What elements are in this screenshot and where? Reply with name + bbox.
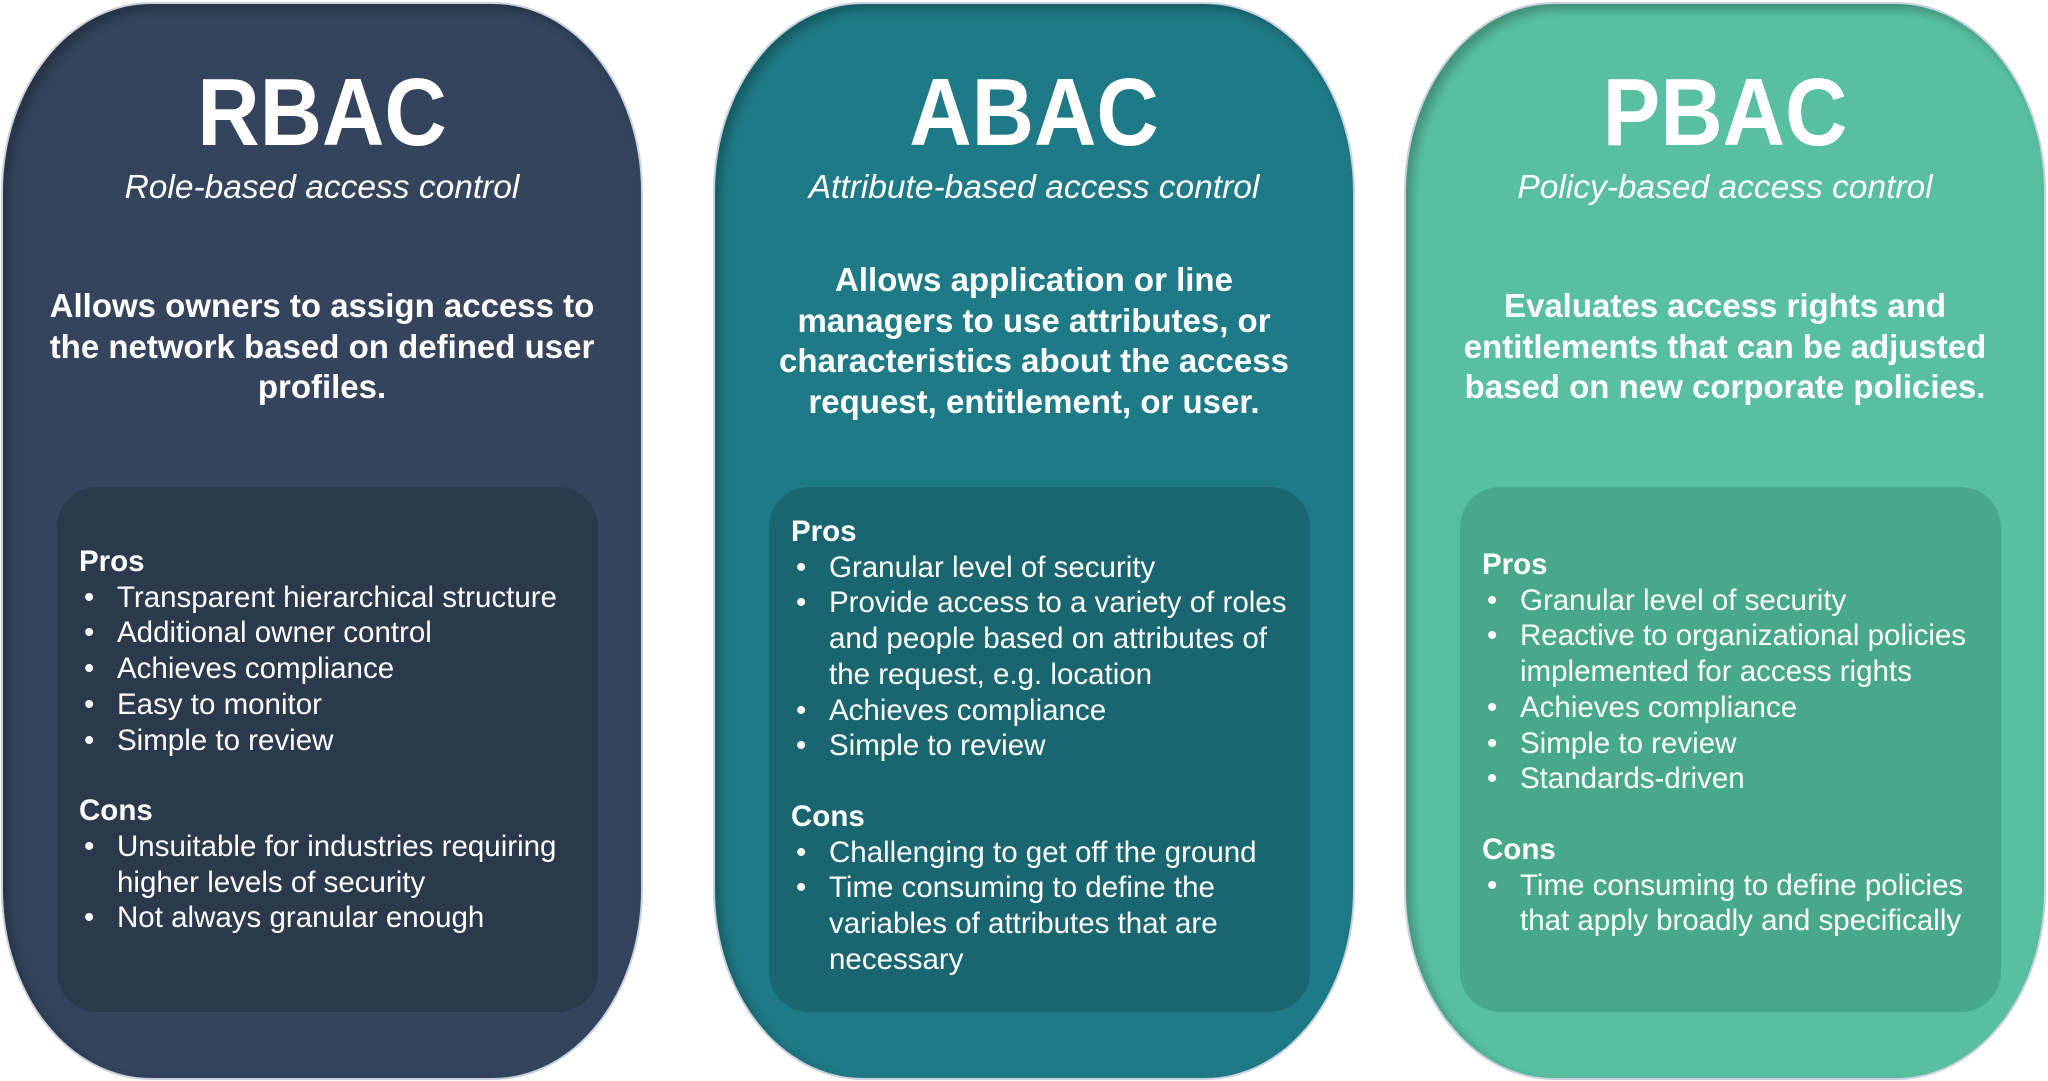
title: ABAC: ABAC bbox=[909, 59, 1159, 166]
description: RBAC bbox=[50, 287, 594, 405]
pros/cons box: PBAC: Simple to review bbox=[1520, 727, 1736, 760]
pros/cons box: RBAC: Cons bbox=[79, 794, 153, 827]
description: RBAC: profiles. bbox=[258, 368, 386, 405]
pros/cons box: ABAC: Granular level of security bbox=[829, 551, 1155, 584]
pros/cons box: RBAC: Unsuitable for industries requiring higher levels of security bbox=[117, 830, 556, 899]
title: RBAC: RBAC bbox=[197, 59, 447, 166]
pros/cons box: RBAC: Not always granular enough bbox=[117, 901, 484, 934]
pros/cons box: ABAC: Pros bbox=[791, 515, 857, 548]
pros/cons box: RBAC: Pros bbox=[79, 545, 145, 578]
pros/cons box: RBAC: Achieves compliance bbox=[117, 652, 394, 685]
pros/cons box: ABAC: Provide access to a variety of roles and people based on attributes of the request, e.g. location bbox=[829, 586, 1286, 691]
description: ABAC bbox=[779, 261, 1289, 420]
description: ABAC: request, entitlement, or user. bbox=[808, 382, 1260, 420]
pros/cons box: PBAC: Achieves compliance bbox=[1520, 691, 1797, 724]
description: PBAC: entitlements that can be adjusted bbox=[1464, 328, 1986, 364]
pros/cons box: PBAC: Reactive to organizational policies implemented for access rights bbox=[1520, 619, 1966, 688]
pros/cons box: ABAC: Achieves compliance bbox=[829, 694, 1106, 727]
description: PBAC bbox=[1464, 287, 1986, 405]
pros/cons box: ABAC: Time consuming to define the variables of attributes that are necessary bbox=[829, 871, 1218, 976]
pros/cons box: PBAC: Granular level of security bbox=[1520, 584, 1846, 617]
pros/cons box: PBAC: Pros bbox=[1482, 548, 1548, 581]
pros/cons box: ABAC bbox=[769, 487, 1310, 1012]
pros/cons box: PBAC: Time consuming to define policies that apply broadly and specifically bbox=[1520, 869, 1963, 937]
panel: RBAC bbox=[1, 2, 643, 1080]
description: ABAC: managers to use attributes, or bbox=[797, 302, 1271, 338]
pros/cons box: PBAC: Cons bbox=[1482, 833, 1556, 866]
pros/cons box: RBAC: Additional owner control bbox=[117, 616, 432, 649]
panel: PBAC bbox=[1404, 2, 2046, 1080]
pros/cons box: ABAC: Cons bbox=[791, 800, 865, 833]
pros/cons box: RBAC bbox=[57, 487, 598, 1012]
panel: ABAC bbox=[713, 2, 1355, 1080]
pros/cons box: RBAC: Easy to monitor bbox=[117, 688, 322, 721]
description: ABAC: characteristics about the access bbox=[779, 342, 1289, 379]
pros/cons box: ABAC: Challenging to get off the ground bbox=[829, 836, 1257, 869]
description: ABAC: Allows application or line bbox=[835, 261, 1233, 298]
description: RBAC: Allows owners to assign access to bbox=[50, 287, 594, 324]
pros/cons box: ABAC: Simple to review bbox=[829, 729, 1045, 762]
pros/cons box: RBAC: Simple to review bbox=[117, 724, 333, 757]
pros/cons box: PBAC bbox=[1460, 487, 2001, 1012]
description: RBAC: the network based on defined user bbox=[50, 328, 594, 364]
subtitle: RBAC: Role-based access control bbox=[125, 169, 519, 206]
subtitle: PBAC: Policy-based access control bbox=[1517, 169, 1933, 206]
description: PBAC: based on new corporate policies. bbox=[1465, 368, 1985, 405]
pros/cons box: PBAC: Standards-driven bbox=[1520, 762, 1745, 795]
pros/cons box: RBAC: Transparent hierarchical structure bbox=[117, 581, 557, 614]
title: PBAC: PBAC bbox=[1603, 59, 1847, 166]
subtitle: ABAC: Attribute-based access control bbox=[809, 169, 1259, 206]
description: PBAC: Evaluates access rights and bbox=[1504, 287, 1946, 324]
